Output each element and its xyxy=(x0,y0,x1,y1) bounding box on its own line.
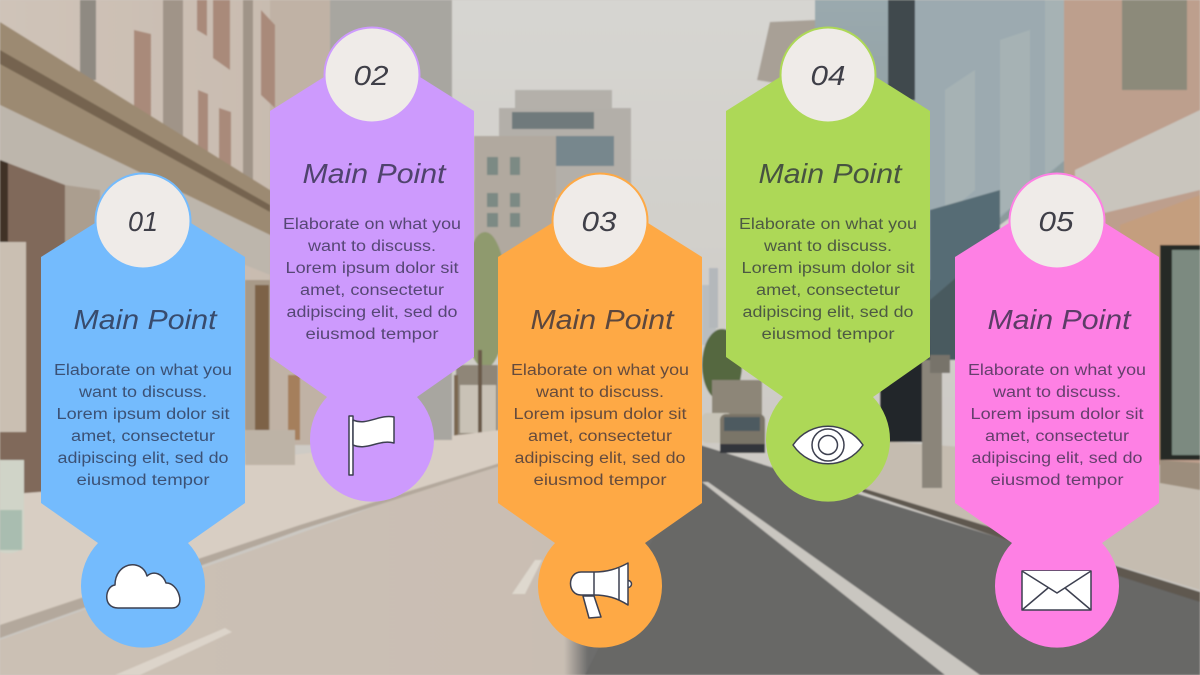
panel shape xyxy=(498,223,702,648)
body text: want to discuss. xyxy=(535,384,664,401)
body text xyxy=(283,216,461,343)
body text: want to discuss. xyxy=(78,384,207,401)
heading: Main Point xyxy=(988,304,1132,335)
glass building xyxy=(815,0,1068,440)
icon: envelope xyxy=(1022,571,1091,610)
body text: want to discuss. xyxy=(992,384,1121,401)
ground-floor openings xyxy=(0,160,65,495)
body text: adipiscing elit, sed do xyxy=(514,450,686,467)
body text xyxy=(511,362,689,489)
body text: want to discuss. xyxy=(307,238,436,255)
panel shape xyxy=(726,77,930,502)
number badge xyxy=(552,174,648,268)
number badge xyxy=(324,28,420,122)
icon: megaphone xyxy=(570,563,632,618)
body text: adipiscing elit, sed do xyxy=(286,304,458,321)
panel shape xyxy=(270,77,474,502)
number badge: 01 xyxy=(128,206,158,237)
body text: amet, consectetur xyxy=(756,282,900,299)
body text: eiusmod tempor xyxy=(306,326,438,343)
panel 01: blue xyxy=(41,174,245,648)
number badge xyxy=(780,28,876,122)
body text: Elaborate on what you xyxy=(968,362,1146,379)
right building xyxy=(1064,0,1200,465)
cornice xyxy=(0,22,330,262)
road markings xyxy=(702,482,980,675)
cars xyxy=(702,413,765,453)
number badge xyxy=(96,174,190,268)
body text xyxy=(739,216,917,343)
icon: flag xyxy=(349,416,394,475)
body text: Lorem ipsum dolor sit xyxy=(56,406,230,423)
panel 05: pink xyxy=(955,174,1159,648)
body text: Lorem ipsum dolor sit xyxy=(514,406,687,423)
left sidewalk xyxy=(0,430,500,628)
body text: amet, consectetur xyxy=(300,282,444,299)
number badge: 02 xyxy=(354,60,389,91)
panel shape xyxy=(955,223,1159,648)
panel 03: orange xyxy=(498,174,702,648)
body text: Elaborate on what you xyxy=(54,362,232,379)
road xyxy=(0,445,1200,675)
body text: adipiscing elit, sed do xyxy=(58,450,228,467)
body text: Lorem ipsum dolor sit xyxy=(286,260,459,277)
heading: Main Point xyxy=(302,158,447,189)
right sidewalk xyxy=(862,440,1200,590)
icon: eye xyxy=(793,426,863,464)
body text: amet, consectetur xyxy=(71,428,215,445)
body text: eiusmod tempor xyxy=(762,326,894,343)
panel 02: purple xyxy=(270,28,474,502)
body text: adipiscing elit, sed do xyxy=(742,304,914,321)
windows on the left xyxy=(80,0,275,190)
icon: cloud xyxy=(107,565,180,608)
heading: Main Point xyxy=(530,304,675,335)
body text xyxy=(968,362,1146,489)
left building xyxy=(0,0,452,495)
panel 04: green xyxy=(726,28,930,502)
number badge xyxy=(1010,174,1104,268)
body text: want to discuss. xyxy=(763,238,892,255)
body text: Lorem ipsum dolor sit xyxy=(742,260,915,277)
panel shape xyxy=(41,223,245,648)
number badge: 04 xyxy=(810,60,846,91)
body text: amet, consectetur xyxy=(985,428,1129,445)
body text xyxy=(54,362,232,489)
planter xyxy=(0,460,24,553)
body text: eiusmod tempor xyxy=(534,472,666,489)
body text: eiusmod tempor xyxy=(76,472,210,489)
number badge: 05 xyxy=(1038,206,1074,237)
trees and low street buildings xyxy=(454,232,762,470)
number badge: 03 xyxy=(582,206,617,237)
heading: Main Point xyxy=(74,304,218,335)
body text: adipiscing elit, sed do xyxy=(972,450,1142,467)
body text: Elaborate on what you xyxy=(739,216,917,233)
body text: Elaborate on what you xyxy=(283,216,461,233)
body text: Elaborate on what you xyxy=(511,362,689,379)
distant buildings xyxy=(474,20,815,345)
heading: Main Point xyxy=(758,158,903,189)
body text: Lorem ipsum dolor sit xyxy=(970,406,1144,423)
body text: amet, consectetur xyxy=(528,428,672,445)
body text: eiusmod tempor xyxy=(990,472,1124,489)
